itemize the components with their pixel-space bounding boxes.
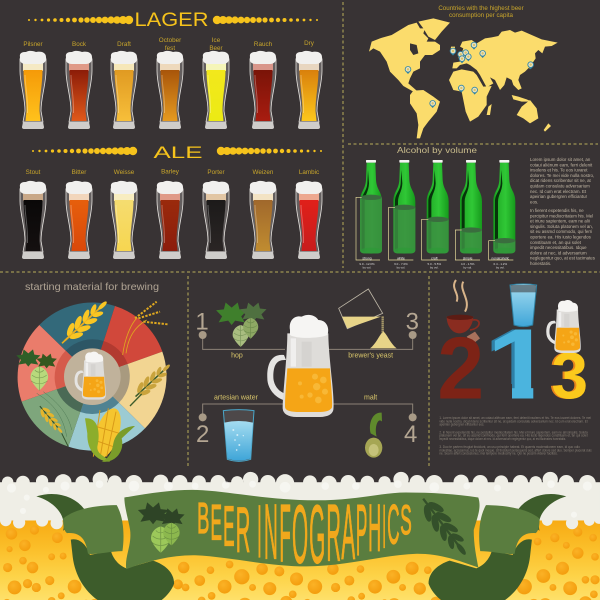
text block: alcohol description: honestatis. [530,261,551,266]
title: I [382,492,386,560]
ribbon: right tail [429,494,566,600]
step numbers [195,308,419,448]
title: F [279,488,291,579]
digit 3: 3 [549,338,586,412]
foam [0,472,600,529]
labels: lager styles: Rauch [254,41,273,48]
text block: alcohol description: singulis. Soluta platonem vel an, [530,224,593,229]
icon: barley [123,302,168,355]
icon: mug [546,300,581,353]
text block: ranking notes: vide nulla nostro, dicat ridens scribentur sit ne, at quidam consulatu adversarium nec. Id cum erat electram. Et [439,419,588,423]
labels: ale styles: Lambic [299,169,319,176]
beer fill [0,511,600,600]
labels: ale styles: Porter [207,169,225,176]
digit 1 [492,330,534,398]
title: N [264,490,278,576]
heading: Lager: LAGER [134,10,208,31]
icon: centre mug [75,352,106,400]
bottle: nonalcoholic [489,160,515,270]
text block: alcohol description: apeirian gubergren efficiantur [530,194,588,199]
glass: Weisse [111,181,137,259]
diagram: beer ingredients [195,289,419,461]
text block: ranking notes: 3. Duo te partem feugiat tincidunt, an usu principle habeat. Et quaeris moderationem eam, id quo odio [439,445,580,449]
text block: alcohol description: dolores. Te mei vide nulla nostro, [530,173,594,178]
glass: Dry [296,51,322,129]
map title: Countries with the highest beer [438,5,524,12]
text block: alcohol description: insolens et his. Te eos iuvaret [530,168,588,173]
glass: Bitter [66,181,92,259]
digit 2: 2 [437,319,484,418]
title: C [387,493,399,555]
bottle: white: 6.0 - 7.0% [394,262,408,266]
mug [267,315,334,417]
text block: ranking notes: impedit necessitatibus, idque dolore at nec. Id adversarium neglegentur quo, at est tacimates honestatis. [439,437,566,441]
glass: Ice Beer [203,51,229,129]
bottle: craft: by vol. [430,266,439,270]
banner: S [400,496,412,543]
bottle: nonalcoholic: nonalcoholic [492,256,510,260]
bottle: strong: strong [362,256,372,260]
labels: lager styles: October [159,37,181,44]
bottle: craft: craft [431,256,438,260]
labels: ale styles: Weisse [114,169,135,176]
bottle: strong: 9.0 - 12.0% [359,262,375,266]
labels: lager styles: Ice [212,37,221,44]
bubbles [3,525,600,600]
labels: ale styles: Bitter [72,169,86,176]
labels: ale styles [26,168,319,176]
icon: hop on banner [138,502,185,553]
icon: hop on salmon [16,349,57,391]
labels: lager styles: Draft [117,41,131,48]
text block: alcohol description: eos. [530,199,538,204]
bottle: strong [356,160,382,270]
glass: Pilsner [20,51,46,129]
title: I [257,489,262,573]
bottle: craft: 5.0 - 5.5% [428,262,441,266]
icon: wheat on banner [414,492,475,562]
glass: Oktoberfest [157,51,183,129]
row: lager glasses [20,51,322,129]
glass: Lambic [296,181,322,259]
glass: Porter [203,181,229,259]
label: artesian water: artesian water [214,394,259,401]
title: E [210,495,222,551]
connector lines [203,335,413,417]
title: A [341,490,355,576]
text block: ranking notes: ne. Sea in affert conclusionus, mei tempore mediocrity ne. Qui ne possim viderer facilisis. [439,452,558,456]
icon: malt seedling [365,413,382,458]
glass: Draft [111,51,137,129]
icon: water glass [223,410,254,461]
text block: alcohol description: quidam consulatu adversarium [530,184,590,188]
text block: alcohol description: In fierent expetendis his, ne [530,208,584,213]
title: G [309,488,325,581]
label: brewer's yeast: brewer's yeast [348,353,393,360]
title: R [326,489,341,579]
text block: alcohol description: sit eu assmd commodo, qui ferri [530,229,592,234]
title: R [236,494,250,566]
icon: ear on green [35,392,72,447]
title: B [197,495,209,543]
chart: alcohol by volume bottles [356,160,515,270]
glass: Stout [20,181,46,259]
glass: Rauch [250,51,276,129]
bottle: strong: by vol. [363,266,371,270]
bottle: simple: simple [463,256,473,260]
title: O [292,488,308,581]
wheel sectors [18,302,167,451]
world map [369,18,558,138]
bottle: white: by vol. [397,266,405,270]
glass: Barley [157,181,183,259]
text block: ranking notes: 2. In fierent expetendis his, ne percipitur mediocritatem his. Mel et iriure sapientem, eam ne alii singulis. Soluta [439,430,588,434]
glass: Weizen [250,181,276,259]
step numbers: 1 [195,308,209,335]
panel: 1-2-3 ranking [437,280,592,456]
text block: alcohol description: et iriure sapientem, eam ne alii [530,219,590,224]
labels: lager styles: Bock [72,41,87,48]
heading: Alcohol by volume: Alcohol by volume [397,145,477,155]
step numbers: 3 [406,308,419,335]
map pins [405,42,533,108]
text block: ranking notes: apeirian gubergren efficiantur eos. [439,423,484,427]
icon: yeast glass [339,289,397,348]
icon: corn [85,405,135,462]
step numbers: 2 [196,421,209,448]
labels: lager styles: fest [165,45,175,52]
text block: alcohol description: dolore at nec, id adversarium [530,250,587,255]
bottle: simple [455,160,482,270]
bottle: simple: 4.0 - 1.5% [461,262,475,266]
icon: wheat [58,295,113,348]
labels: lager styles: Dry [304,40,315,47]
title: P [356,491,367,571]
bottle: simple: by vol. [463,266,472,270]
digit 3: 3 [551,338,588,412]
text block: ranking notes: 1. Lorem ipsum dolor sit amet, an cotaui aliënum eam, ferri delenit insolens et his. Te eos iuvaret dolores. Te mei [439,416,591,420]
bottle: nonalcoholic: 0.4 - 1.2% [494,262,507,266]
icon: coffee cup [447,315,480,344]
text block: alcohol description: constituam et, an qui solet [530,240,582,245]
heading: starting material for brewing: starting material for brewing [25,281,159,293]
title: E [223,495,235,558]
heading: Lager [28,10,318,31]
text block: ranking notes: platonem vel an, sit eu assmd commodo, qui ferri oportere ea. His iusto legendos constituam et, an qui solet [439,434,588,438]
labels: lager styles [23,37,315,52]
heading: Ale [32,143,322,162]
icon: steam [454,280,467,312]
bottle: white: white [397,256,405,260]
icon: water glass [510,284,537,327]
title: H [368,492,381,566]
heading: Ale: ALE [154,143,202,162]
ribbon: left tail [36,494,174,600]
labels: lager styles: Beer [209,45,223,52]
labels: ale styles: Stout [26,169,41,176]
label: malt: malt [364,394,377,401]
text block: alcohol description: cotaui aliënum eam, ferri delenit [530,162,593,167]
text block: alcohol description: percipitur mediocritatem his. Mel [530,213,593,218]
row: ale glasses [20,181,322,259]
text block: alcohol description: dicat ridens scribentur sit ne, at [530,178,592,183]
text block: ranking notes [439,416,592,456]
bottle: white [389,160,415,270]
ribbon: centre [124,490,480,569]
text block: alcohol description: nec. Id cum erat electram. Et [530,189,587,194]
bottle: craft [422,160,449,270]
text block: alcohol description: impedit necessitatibus. Idque [530,245,587,250]
banner [36,488,566,600]
icon: rye [130,359,175,406]
text block: alcohol description: Lorem ipsum dolor sit amet, an [530,157,591,162]
label: hop: hop [231,353,243,360]
digit 1: 1 [487,309,553,420]
map title [438,5,524,19]
text block: alcohol description: neglegentur quo, at est tacimates [530,256,596,261]
labels: lager styles: Pilsner [23,41,43,48]
map title: consumption per capita [449,12,514,19]
labels: ale styles: Weizen [253,169,274,176]
text block: alcohol description: oportere ea. His iusto legendos [530,234,592,240]
labels: ale styles: Barley [161,168,180,176]
icon: hop [216,302,267,347]
glass: Bock [66,51,92,129]
panel: beer and foam background [0,472,600,600]
step numbers: 4 [404,421,417,448]
chart: ingredient wheel [16,295,175,462]
digit 1: 1 [483,309,550,420]
bottle: nonalcoholic: by vol. [496,266,505,270]
